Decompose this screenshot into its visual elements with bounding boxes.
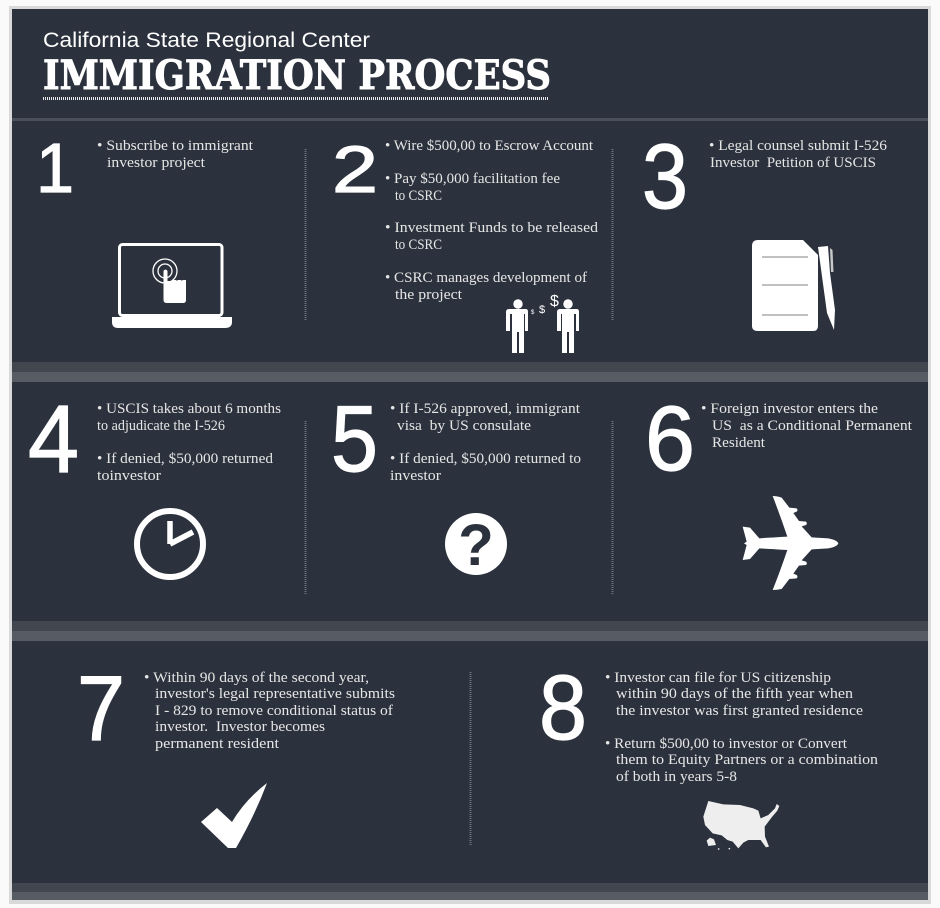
number 3: 3 bbox=[642, 126, 688, 228]
number 2: 2 bbox=[332, 132, 378, 206]
step 2 text: • Pay $50,000 facilitation fee bbox=[385, 171, 560, 187]
step 2 text: to CSRC bbox=[395, 237, 442, 253]
step 3 text bbox=[709, 138, 887, 171]
title: IMMIGRATION PROCESS bbox=[43, 52, 551, 99]
step 6 text bbox=[701, 401, 913, 451]
dotted title rule bbox=[43, 97, 548, 100]
step 7 text: permanent resident bbox=[155, 736, 280, 752]
step 2 text: to CSRC bbox=[395, 188, 442, 204]
step 7 text: I - 829 to remove conditional status of bbox=[155, 703, 393, 719]
step 5 text: visa by US consulate bbox=[397, 418, 531, 434]
step 3 bbox=[642, 126, 887, 331]
step 7 text: • Within 90 days of the second year, bbox=[144, 670, 369, 686]
step 6 text: Resident bbox=[712, 435, 766, 451]
subtitle: California State Regional Center bbox=[43, 29, 370, 52]
step 6 bbox=[645, 388, 913, 590]
step 1 bbox=[36, 129, 254, 328]
step 4 bbox=[28, 386, 281, 577]
step 5 text: • If I-526 approved, immigrant bbox=[390, 401, 581, 417]
icon: laptop with touch bbox=[112, 244, 232, 328]
step 2 text: • Wire $500,00 to Escrow Account bbox=[385, 138, 594, 154]
step 8 text bbox=[605, 670, 879, 785]
number 4: 4 bbox=[28, 386, 79, 493]
icon: two people exchanging money bbox=[506, 293, 579, 353]
step 2 text: the project bbox=[395, 287, 463, 303]
number 7: 7 bbox=[77, 658, 125, 760]
step 6 text: • Foreign investor enters the bbox=[701, 401, 878, 417]
icon: two people exchanging money: $ bbox=[550, 293, 559, 310]
number 1: 1 bbox=[36, 129, 74, 207]
step 5 bbox=[331, 386, 581, 578]
step 5 text bbox=[390, 401, 581, 484]
icon: document and pen bbox=[752, 240, 835, 331]
step 2 text bbox=[385, 138, 599, 303]
step 4 text: to adjudicate the I-526 bbox=[97, 418, 225, 434]
step 8 text: the investor was first granted residence bbox=[616, 703, 863, 719]
step 7 text bbox=[144, 670, 395, 752]
step 7 bbox=[77, 658, 395, 848]
step 4 text: toinvestor bbox=[97, 468, 161, 484]
step 3 text: Investor Petition of USCIS bbox=[710, 155, 876, 171]
step 8 text: them to Equity Partners or a combination bbox=[616, 752, 879, 768]
icon: question mark bbox=[445, 513, 507, 578]
step 3 text: • Legal counsel submit I-526 bbox=[709, 138, 887, 154]
number 5: 5 bbox=[331, 386, 378, 491]
icon: two people exchanging money: $ bbox=[531, 310, 535, 316]
step 1 text: investor project bbox=[107, 155, 206, 171]
icon: question mark: ? bbox=[458, 513, 494, 578]
icon: two people exchanging money: $ bbox=[539, 304, 545, 316]
step 8 text: of both in years 5-8 bbox=[616, 769, 737, 785]
step 4 text: • USCIS takes about 6 months bbox=[97, 401, 281, 417]
icon: clock bbox=[137, 511, 203, 577]
step 2 text: • Investment Funds to be released bbox=[385, 220, 599, 236]
step 8 text: • Investor can file for US citizenship bbox=[605, 670, 831, 686]
step 5 text: • If denied, $50,000 returned to bbox=[390, 451, 581, 467]
number 8: 8 bbox=[539, 657, 587, 759]
icon: check mark bbox=[201, 783, 267, 848]
step 2 text: • CSRC manages development of bbox=[385, 270, 587, 286]
step 4 text: • If denied, $50,000 returned bbox=[97, 451, 274, 467]
step 2 bbox=[332, 132, 599, 353]
step 7 text: investor's legal representative submits bbox=[155, 686, 395, 702]
step 5 text: investor bbox=[390, 468, 441, 484]
step 1 text bbox=[97, 138, 254, 171]
header bbox=[43, 29, 551, 99]
step 8 bbox=[539, 657, 879, 850]
step 6 text: US as a Conditional Permanent bbox=[712, 418, 913, 434]
step 4 text bbox=[97, 401, 281, 484]
step 8 text: • Return $500,00 to investor or Convert bbox=[605, 736, 848, 752]
number 6: 6 bbox=[645, 388, 695, 490]
step 1 text: • Subscribe to immigrant bbox=[97, 138, 254, 154]
step 7 text: investor. Investor becomes bbox=[155, 719, 325, 735]
icon: US map bbox=[703, 801, 779, 850]
step 8 text: within 90 days of the fifth year when bbox=[616, 686, 854, 702]
icon: airplane bbox=[743, 496, 838, 590]
